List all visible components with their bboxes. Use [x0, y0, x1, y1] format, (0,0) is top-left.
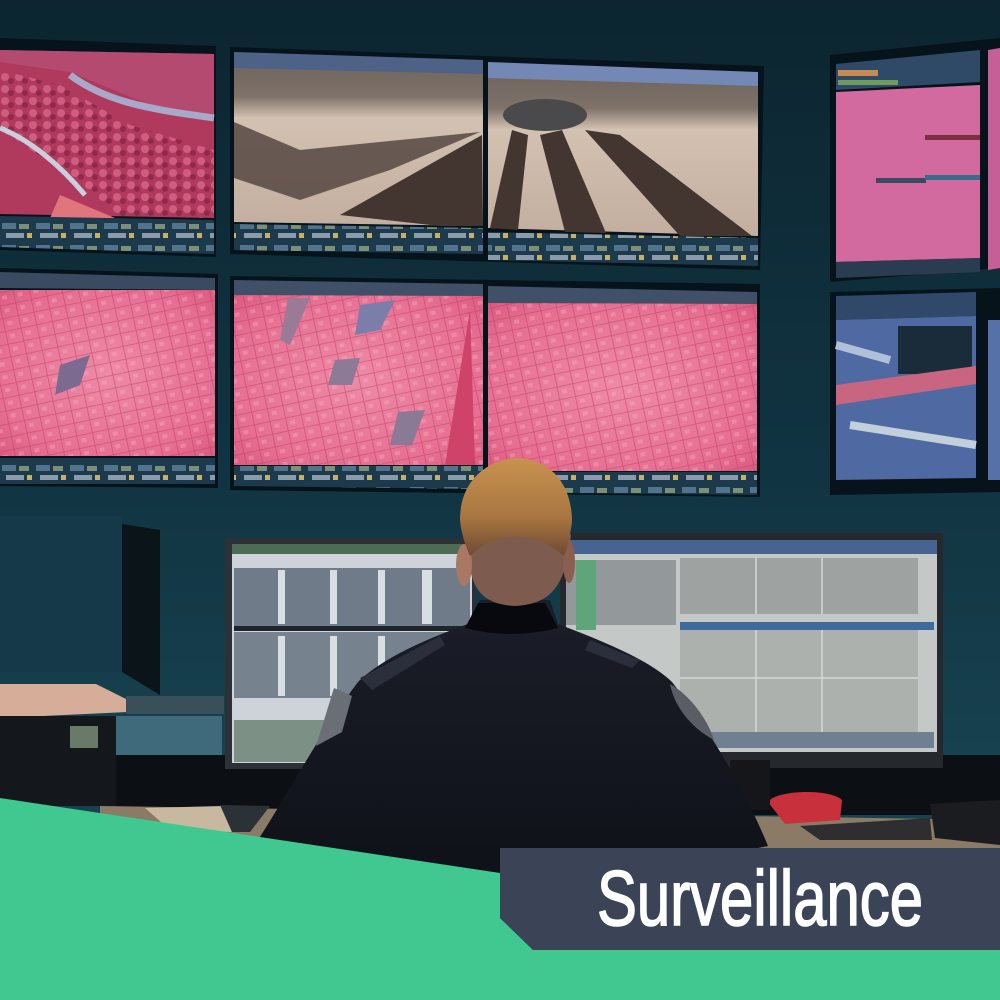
video wall: lower left screen: [0, 268, 218, 488]
right desk monitor: [560, 533, 943, 768]
title banner: [500, 848, 1000, 950]
left desk monitor: [225, 538, 475, 769]
officer neck and head: [468, 521, 571, 606]
right desk items: [730, 760, 1000, 845]
officer: [258, 458, 768, 880]
video wall: lower right screens: [830, 288, 1000, 495]
officer epaulette: [360, 636, 445, 690]
green corner shape: [0, 798, 1000, 1000]
video wall: top centre screens: [230, 47, 764, 270]
left cabinet: [0, 516, 224, 806]
video wall: lower centre screens: [230, 276, 760, 497]
officer hair: [460, 458, 572, 556]
desk dark band: [116, 755, 1000, 815]
left desk papers and keyboard: [145, 805, 676, 855]
video wall: upper right screens: [830, 38, 1000, 282]
desk surface: [100, 806, 1000, 860]
officer body: [258, 600, 768, 880]
officer shoulder patches: [316, 688, 352, 746]
officer collar: [465, 603, 558, 634]
video wall: top left screen: [0, 38, 216, 257]
